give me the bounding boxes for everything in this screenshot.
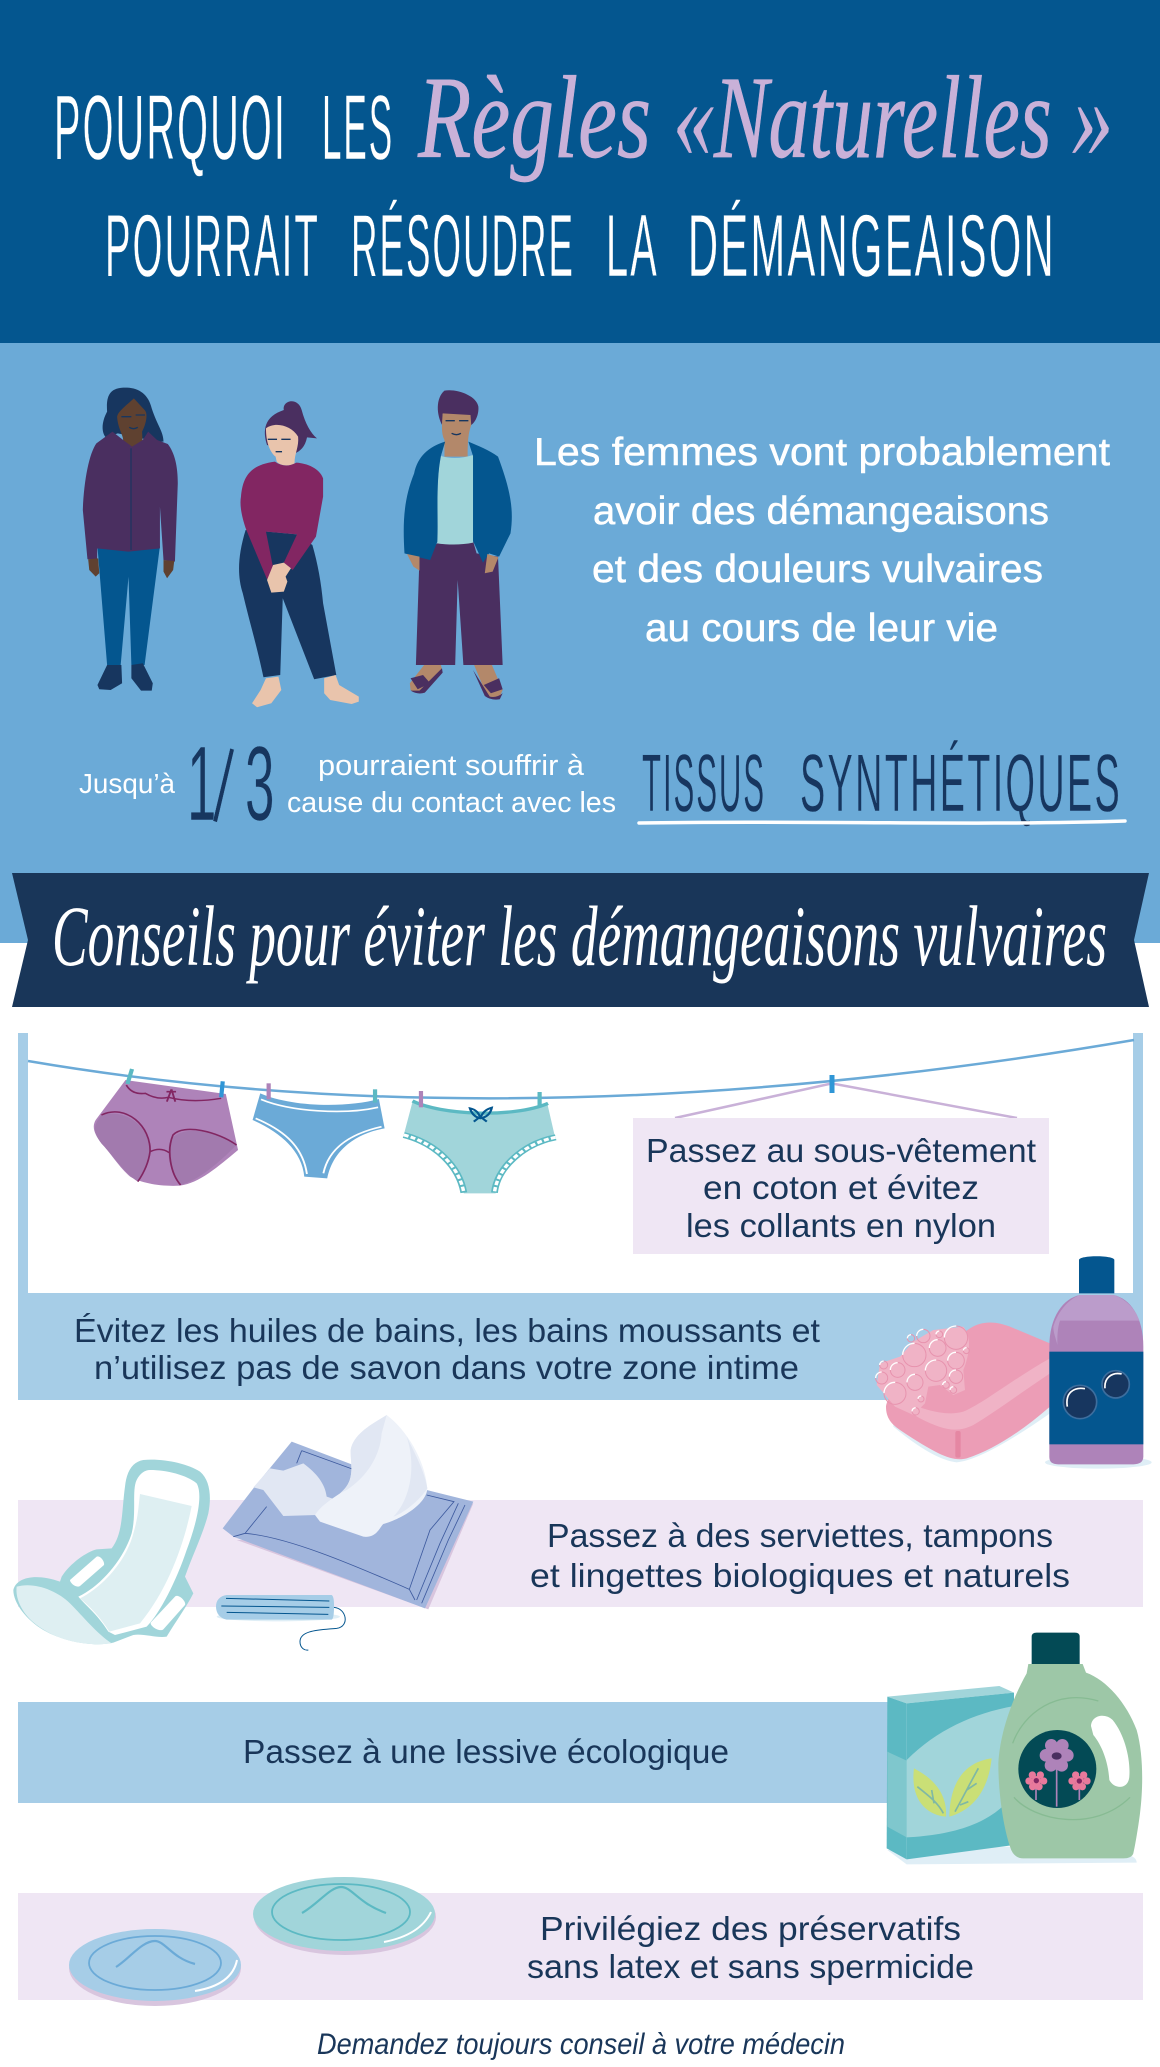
tip 2: soap: Évitez les huiles de bains, les bains moussants et — [74, 1312, 820, 1349]
tip 2: soap — [18, 1256, 1152, 1469]
intro text: et des douleurs vulvaires — [592, 548, 1043, 591]
intro text — [534, 431, 1110, 650]
tips banner — [12, 873, 1149, 1007]
flowers — [1025, 1739, 1091, 1807]
header panel — [0, 0, 1160, 343]
title line 2: POURRAIT — [105, 196, 320, 295]
tip 3: pads, wipes, tampons: Passez à des serviettes, tampons — [547, 1517, 1053, 1554]
statistic: one third: 1 — [187, 724, 216, 843]
intro text: au cours de leur vie — [645, 607, 998, 650]
title line 1: POURQUOI — [54, 77, 287, 179]
tip 1: clothesline — [18, 1033, 1143, 1343]
statistic: one third: / — [211, 725, 236, 848]
person 2 — [239, 401, 359, 707]
statistic row: Jusqu’à — [79, 768, 175, 799]
title line 2 — [105, 196, 1056, 295]
icons: soap and bottle — [876, 1256, 1152, 1469]
tip 4: detergent — [18, 1633, 1142, 1864]
teal underwear — [404, 1101, 556, 1193]
soap bar — [876, 1322, 1050, 1459]
underwear illustrations — [94, 1069, 556, 1193]
tip 2: soap: n’utilisez pas de savon dans votre zone intime — [94, 1349, 799, 1386]
tip 5: condoms: sans latex et sans spermicide — [527, 1948, 974, 1985]
icons: hygiene products — [13, 1415, 473, 1650]
peg for sign — [830, 1075, 834, 1093]
clothes pegs — [127, 1069, 540, 1107]
title line 1: Règles — [417, 52, 651, 183]
tip 1 card: en coton et évitez — [703, 1169, 979, 1206]
intro panel — [0, 343, 1160, 943]
tip 3: pads, wipes, tampons: et lingettes biologiques et naturels — [530, 1557, 1070, 1594]
title line 2: LA — [606, 196, 659, 295]
footer note: Demandez toujours conseil à votre médecin — [317, 2028, 845, 2061]
shampoo bottle — [1049, 1256, 1143, 1464]
title line 1 — [54, 52, 1113, 183]
title line 1: LES — [322, 77, 394, 179]
person 1 — [83, 388, 178, 691]
intro text: avoir des démangeaisons — [593, 490, 1049, 533]
icon: blue condom — [69, 1929, 241, 2006]
purple underwear — [94, 1080, 238, 1186]
tampon — [216, 1595, 345, 1650]
hanging sign strings — [675, 1084, 1017, 1118]
statistic: one third: 3 — [245, 724, 274, 843]
title line 2: RÉSOUDRE — [351, 196, 575, 295]
icons: laundry products — [887, 1633, 1142, 1864]
tip 4: detergent: Passez à une lessive écologique — [243, 1733, 729, 1770]
statistic row: pourraient souffrir à — [318, 750, 585, 782]
blue underwear — [253, 1093, 385, 1178]
tip 3: pads, wipes, tampons — [13, 1415, 1143, 1650]
statistic row — [79, 724, 1125, 848]
statistic row: cause du contact avec les — [287, 787, 616, 819]
tip 5: condoms — [18, 1877, 1143, 2006]
illustration: three women — [83, 388, 512, 707]
leaves — [913, 1758, 992, 1817]
person 3 — [404, 390, 512, 700]
synthetic fabrics label: TISSUS — [642, 738, 766, 829]
tip 1 card — [633, 1118, 1049, 1254]
icon: teal condom — [253, 1877, 436, 1955]
intro text: Les femmes vont probablement — [534, 431, 1110, 474]
tip 1 card: Passez au sous-vêtement — [646, 1132, 1036, 1169]
wipes pack — [223, 1415, 473, 1609]
tip 1 card: les collants en nylon — [686, 1207, 996, 1244]
synthetic fabrics label — [642, 738, 1122, 829]
sanitary pad — [13, 1460, 210, 1644]
washing powder box — [887, 1686, 1014, 1859]
tip 5: condoms: Privilégiez des préservatifs — [540, 1910, 961, 1947]
detergent bottle — [998, 1633, 1142, 1858]
